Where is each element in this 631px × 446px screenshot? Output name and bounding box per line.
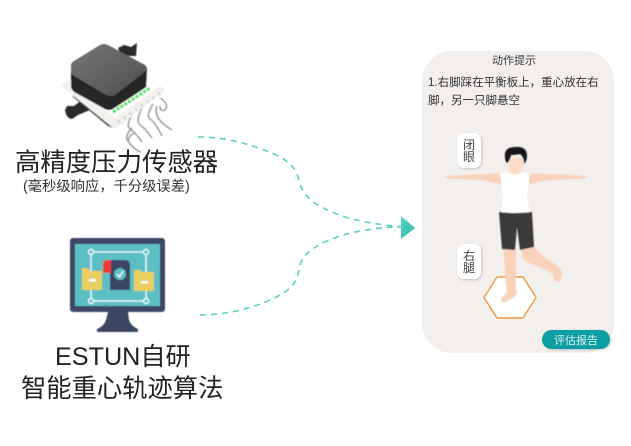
heading: algorithm line 2: 智能重心轨迹算法 [21, 375, 223, 403]
chip: eyes closed: 闭 [463, 138, 475, 152]
selection frame [88, 250, 148, 304]
balance board hexagon [484, 277, 536, 318]
chip: eyes closed [457, 133, 481, 168]
left port [65, 100, 90, 119]
arrowhead [401, 216, 415, 239]
standing leg [501, 248, 517, 302]
shirt [500, 173, 530, 213]
document [110, 260, 130, 290]
neck and face [509, 158, 524, 176]
green strip [113, 88, 150, 112]
leads [127, 98, 172, 152]
chip: right leg [457, 244, 481, 279]
folder left [82, 268, 102, 290]
monitor screen [75, 244, 160, 306]
monitor bezel [70, 238, 165, 312]
lead pads [118, 92, 162, 122]
heading: pressure sensor: 高精度压力传感器 [15, 149, 218, 177]
icon: pressure sensor [60, 43, 172, 152]
button: assessment report [542, 330, 610, 349]
instruction text: 1.右脚踩在平衡板上，重心放在右 [428, 75, 599, 89]
monitor stand [97, 312, 138, 332]
right port [118, 43, 137, 58]
button: assessment report: 评估报告 [554, 333, 598, 347]
shorts [499, 212, 534, 250]
chip: right leg: 腿 [463, 261, 475, 275]
subheading: sensor specs: (毫秒级响应，千分级误差) [23, 179, 190, 195]
figure: standing person [445, 147, 587, 302]
hair [505, 147, 527, 164]
instruction text [428, 75, 599, 107]
folder right [134, 270, 154, 291]
heading: algorithm line 1: ESTUN自研 [55, 343, 191, 371]
housing top [71, 44, 147, 96]
arms [445, 174, 501, 184]
panel heading: 动作提示 [492, 54, 536, 67]
panel: action prompt [422, 51, 614, 353]
icon: monitor [70, 238, 165, 332]
housing body [71, 68, 147, 110]
chip: eyes closed: 眼 [463, 150, 475, 164]
base board [60, 80, 165, 128]
instruction text: 脚，另一只脚悬空 [428, 93, 520, 107]
board underside [72, 96, 116, 128]
raised leg [521, 246, 562, 282]
chip: right leg: 右 [463, 248, 475, 263]
arrow: sensor to panel [198, 137, 402, 227]
arrow: algorithm to panel [200, 227, 402, 315]
